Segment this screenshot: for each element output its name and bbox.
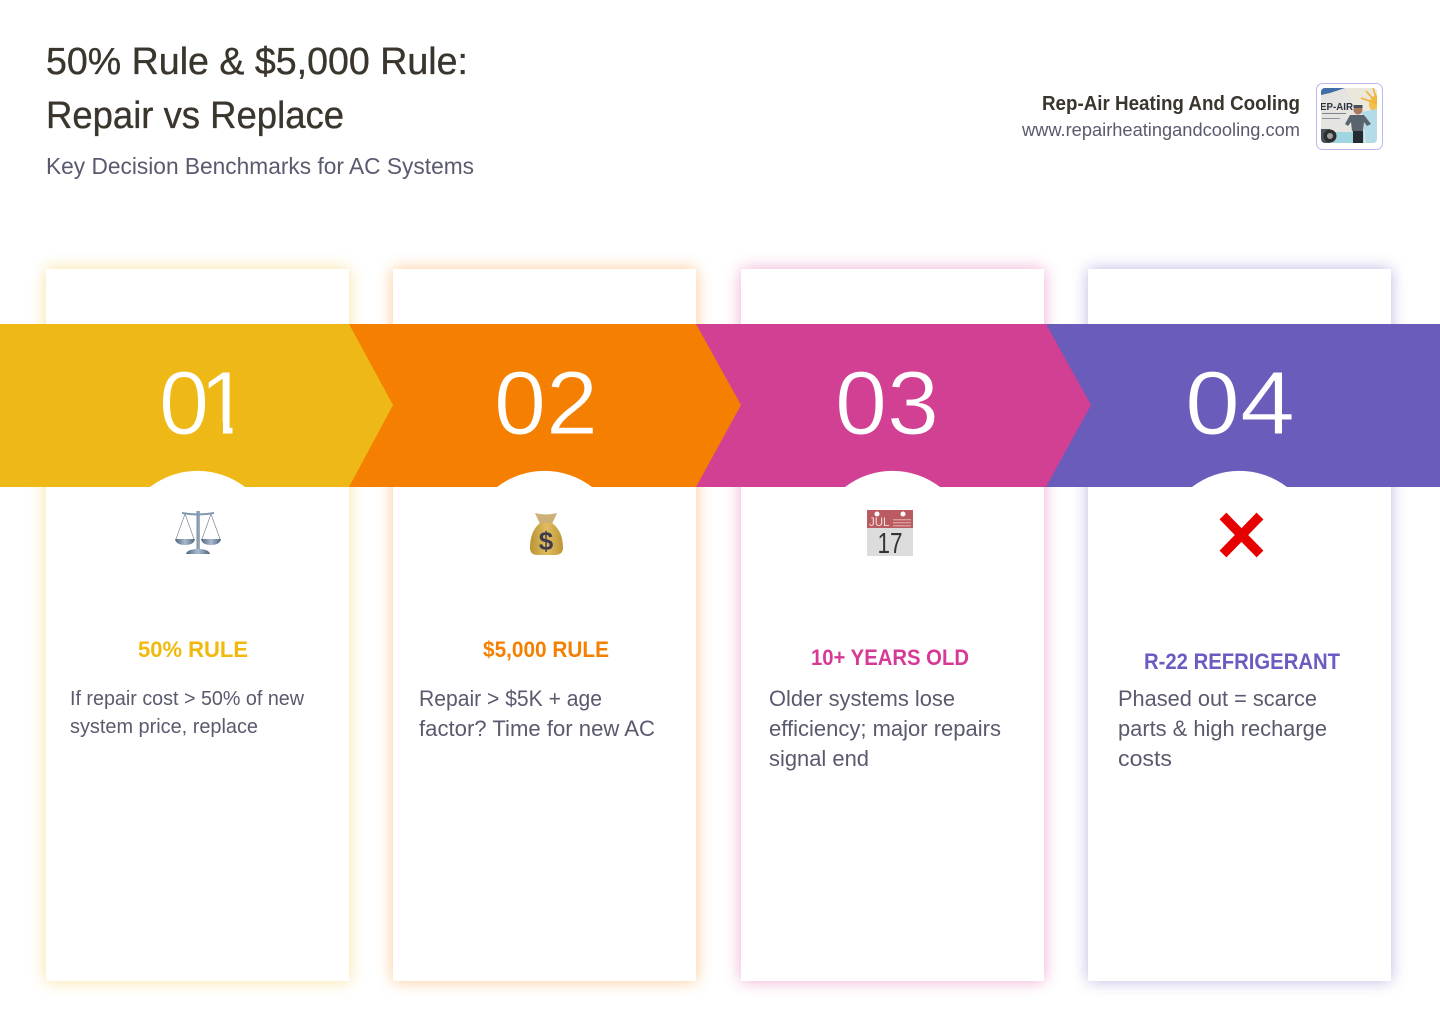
heading: $5,000 RULE [483,637,609,662]
icon: money bag: $ [539,526,554,556]
heading: R-22 REFRIGERANT [1144,649,1341,674]
step number 03: 03 [835,354,939,454]
body [769,686,1001,771]
card 2 background [393,269,696,981]
icon: balance scale [175,511,221,554]
icon: calendar [867,510,913,560]
body [419,686,655,741]
header title block [46,41,474,179]
body: factor? Time for new AC [419,716,655,741]
body [1118,686,1327,771]
chevron band 04 [1040,324,1440,487]
chevron band 02 [340,324,741,487]
brand block [1021,84,1387,150]
hump 2 [497,471,592,487]
brand logo photo: EP-AIR [1320,101,1353,113]
card shadows [46,269,1391,981]
card 1 background [46,269,349,981]
body: Phased out = scarce [1118,686,1317,711]
heading: 50% RULE [138,637,248,662]
body: Repair > $5K + age [419,686,602,711]
step number 02: 02 [494,354,598,454]
brand logo photo [1316,84,1387,150]
title [46,41,468,137]
panel: $5,000 rule text [419,637,655,741]
step number 01: 1 [200,354,250,454]
body: signal end [769,746,869,771]
icon: cross mark [1223,516,1260,554]
step number 01: 0 [159,354,209,454]
subtitle: Key Decision Benchmarks for AC Systems [46,153,474,179]
hump 3 [845,471,940,487]
title: 50% Rule & $5,000 Rule: [46,41,468,83]
step number 04: 04 [1185,354,1295,454]
hump 4 [1192,471,1287,487]
brand name: Rep-Air Heating And Cooling [1042,93,1300,115]
card 3 background [741,269,1044,981]
body: parts & high recharge [1118,716,1327,741]
hump 1 [150,471,245,487]
body [70,688,305,738]
heading: 10+ YEARS OLD [811,645,969,670]
chevron band 03 [690,324,1091,487]
body: If repair cost > 50% of new [70,688,305,710]
brand website: www.repairheatingandcooling.com [1021,120,1300,140]
card 4 background [1088,269,1391,981]
body: system price, replace [70,716,258,738]
body: costs [1118,746,1172,771]
chevron band 01 [0,324,393,487]
icon: calendar: JUL [869,517,890,529]
body: efficiency; major repairs [769,716,1001,741]
panel: R-22 refrigerant text [1118,649,1341,771]
step number 01 [163,372,232,434]
panel: 50% rule text [70,637,305,738]
title: Repair vs Replace [46,95,344,137]
panel: 10+ years old text [769,645,1001,771]
icon: money bag [530,513,563,556]
body: Older systems lose [769,686,955,711]
icon: calendar: 17 [878,528,902,560]
